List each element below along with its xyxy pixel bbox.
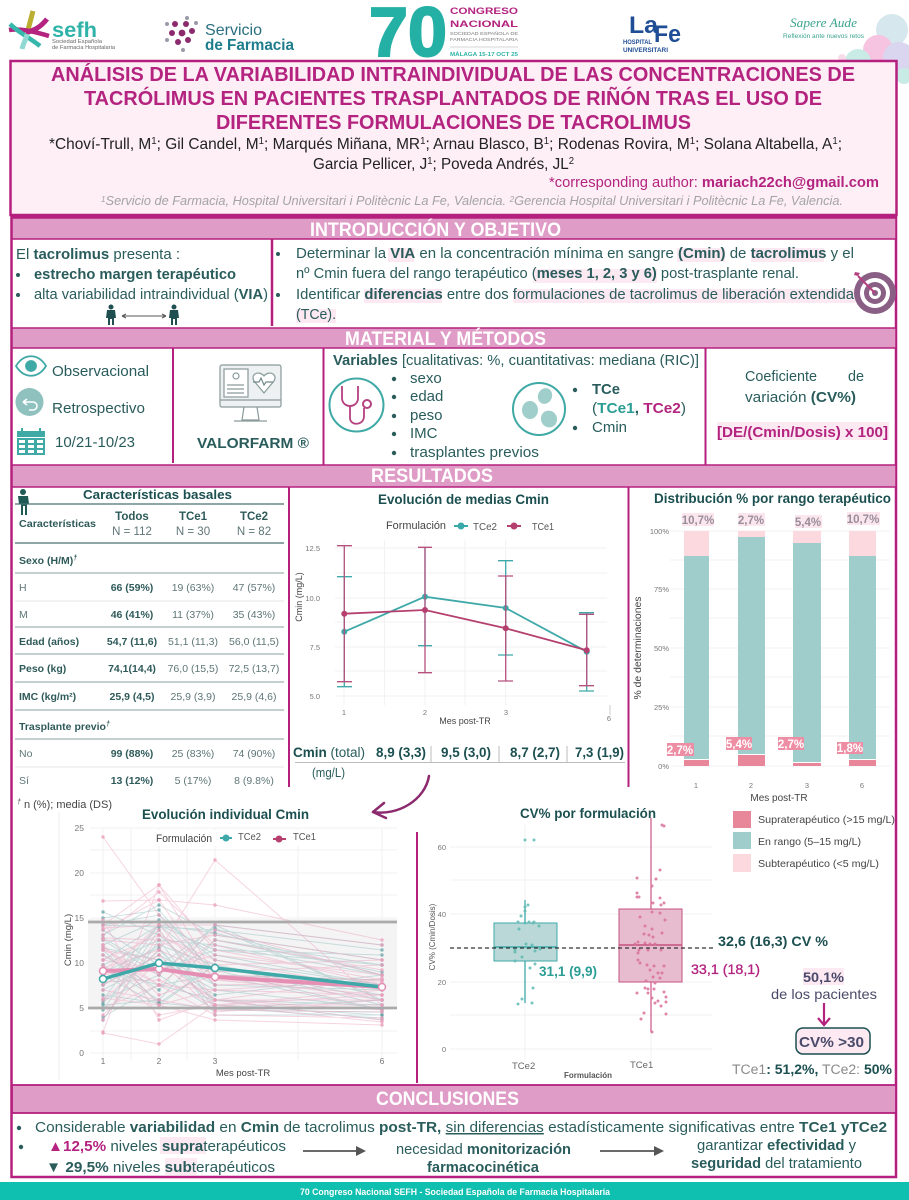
title: ANÁLISIS DE LA VARIABILIDAD INTRAINDIVIDUAL DE LAS CONCENTRACIONES DE xyxy=(51,63,855,86)
authors: 1 xyxy=(690,136,696,147)
spaghetti chart xyxy=(63,823,397,1079)
legend: Formulación xyxy=(386,520,446,532)
line chart: 10.0 xyxy=(305,594,320,603)
affiliations: Gerencia Hospital Universitari i Politècnic La Fe, Valencia. xyxy=(514,194,843,208)
spaghetti chart: 10 xyxy=(75,958,84,968)
logo: 70 congreso nacional: FARMACIA HOSPITALARIA xyxy=(450,37,518,42)
legend: TCe1 xyxy=(532,522,554,533)
reference line xyxy=(450,947,713,949)
table: header: Características xyxy=(19,518,96,530)
title: DIFERENTES FORMULACIONES DE TACROLIMUS xyxy=(216,112,691,134)
panel: diseño del estudio xyxy=(16,348,173,463)
table: header: N = 82 xyxy=(237,526,271,538)
title: TACRÓLIMUS EN PACIENTES TRASPLANTADOS DE RIÑÓN TRAS EL USO DE xyxy=(84,86,822,110)
mean lines xyxy=(100,960,386,990)
footer band: 70 Congreso Nacional SEFH - Sociedad Española de Farmacia Hospitalaria xyxy=(300,1187,611,1197)
heading: material y métodos xyxy=(12,328,896,350)
logo: sefh: Sociedad Española xyxy=(52,39,102,45)
authors: 1 xyxy=(259,136,264,147)
panel: coeficiente de variación: de xyxy=(848,368,864,385)
table footnote: † xyxy=(17,799,21,806)
table: cmin total: 7,3 (1,9) xyxy=(575,745,624,760)
text: niveles: ▲12,5% niveles supraterapéuticos xyxy=(48,1138,286,1155)
stacked bar chart: 0% xyxy=(658,762,669,771)
icon: target xyxy=(854,272,896,314)
text: niveles: ▼ 29,5% niveles subterapéuticos xyxy=(46,1159,275,1176)
corresponding author: *corresponding author: mariach22ch@gmail.com xyxy=(549,174,879,191)
text: objetivos: (TCe). xyxy=(296,306,336,323)
table: cmin total: (mg/L) xyxy=(312,765,345,780)
legend xyxy=(150,830,322,846)
table: rows: 74,1(14,4) xyxy=(108,663,156,675)
authors: ; Marqués Miñana, MR xyxy=(264,136,420,153)
individual lines: tce2 xyxy=(103,905,382,1020)
authors: ; Poveda Andrés, JL xyxy=(432,156,569,173)
heading: introducción y objetivo xyxy=(12,218,896,241)
list: variables xyxy=(392,370,539,461)
authors: Garcia Pellicer, J xyxy=(313,156,433,173)
legend: rango terapéutico: Subterapéutico (<5 mg/L) xyxy=(758,858,879,870)
main frame xyxy=(12,217,896,1177)
table: rows: IMC (kg/m²) xyxy=(19,691,76,703)
spaghetti chart: Cmin (mg/L) xyxy=(63,914,74,966)
table: rows: 56,0 (11,5) xyxy=(229,636,279,648)
table: rows: 13 (12%) xyxy=(111,775,153,787)
table: rows: 35 (43%) xyxy=(233,609,275,621)
line chart: 2 xyxy=(423,708,427,717)
spaghetti chart: Mes post-TR xyxy=(216,1068,270,1079)
panel: coeficiente de variación: Coeficiente xyxy=(745,368,817,385)
table: rows: Edad (años) xyxy=(19,636,79,648)
icon: person xyxy=(18,489,29,515)
series: tce2 xyxy=(337,548,594,691)
labels: supraterapéutico: 2,7% xyxy=(778,739,804,751)
table: header: N = 112 xyxy=(112,526,152,538)
logo: sapere aude: Sapere Aude xyxy=(790,15,857,30)
panel: diseño del estudio: Retrospectivo xyxy=(52,400,145,417)
line chart xyxy=(294,540,611,726)
line chart: 5.0 xyxy=(310,692,320,701)
panel: valorfarm xyxy=(197,348,324,466)
logo: 70 congreso nacional xyxy=(369,0,518,71)
stacked bar chart xyxy=(632,512,890,804)
table: rows: M xyxy=(19,609,28,621)
list: variables: sexo xyxy=(410,370,442,387)
table lines xyxy=(15,504,284,767)
panel: características basales xyxy=(15,487,289,811)
authors: 1 xyxy=(427,156,433,167)
heading: resultados: RESULTADOS xyxy=(371,466,493,487)
icon: calendar xyxy=(17,428,45,455)
boxplot chart: 0 xyxy=(442,1045,446,1054)
stacked bar chart: 50% xyxy=(654,644,669,653)
chart title: CV% por formulación xyxy=(520,806,656,821)
panel: valorfarm: VALORFARM ® xyxy=(197,435,309,452)
list: variables: IMC xyxy=(410,425,438,442)
panel: diseño del estudio: 10/21-10/23 xyxy=(55,434,135,451)
list: variables: edad xyxy=(410,388,443,405)
spaghetti chart: 15 xyxy=(75,913,84,923)
labels: subterapéutico: 5,4% xyxy=(795,517,821,529)
panel: evolución individual cmin xyxy=(59,807,397,1080)
heading: material y métodos: MATERIAL Y MÉTODOS xyxy=(345,328,546,350)
logo: 70 congreso nacional: NACIONAL xyxy=(450,19,518,30)
table: rows: Sexo (H/M) xyxy=(19,555,73,567)
footer band xyxy=(0,1182,909,1200)
icon: back arrow xyxy=(16,388,44,416)
table: rows: 25 (83%) xyxy=(172,748,214,760)
spaghetti chart: 6 xyxy=(380,1056,385,1066)
logo: 70 congreso nacional: CONGRESO xyxy=(450,6,518,17)
table: rows: 72,5 (13,7) xyxy=(229,663,279,675)
table: header: Todos xyxy=(115,511,149,523)
logo: 70 congreso nacional: SOCIEDAD ESPAÑOLA DE xyxy=(450,30,518,36)
icon: pills xyxy=(513,383,565,435)
logo: sefh: sefh xyxy=(52,19,97,42)
table: rows: 54,7 (11,6) xyxy=(107,636,157,648)
table: header: TCe1 xyxy=(179,511,208,523)
legend xyxy=(386,520,554,533)
line chart: 12.5 xyxy=(305,544,320,553)
logo: servicio de farmacia xyxy=(165,16,294,54)
logo: la fe: La xyxy=(629,12,659,39)
spaghetti chart: 1 xyxy=(101,1056,106,1066)
annotations: medians: 31,1 (9,9) xyxy=(539,964,597,979)
table: rows xyxy=(19,555,279,787)
list: variables: trasplantes previos xyxy=(410,444,539,461)
spaghetti chart: 5 xyxy=(79,1003,84,1013)
table: header: TCe2 xyxy=(240,511,268,523)
table: rows: Trasplante previo xyxy=(19,721,106,733)
text: efectividad y seguridad xyxy=(691,1137,862,1172)
stacked bar chart: % de determinaciones xyxy=(632,596,644,700)
stacked bar chart: 25% xyxy=(654,703,669,712)
authors: 1 xyxy=(420,136,426,147)
affiliations: 2 xyxy=(509,195,515,204)
labels: supraterapéutico: 1,8% xyxy=(837,743,863,755)
text: niveles xyxy=(19,1137,286,1176)
authors: *Choví-Trull, M xyxy=(49,136,155,153)
boxplot chart: Formulación xyxy=(564,1071,612,1080)
table: rows: 46 (41%) xyxy=(111,609,153,621)
list: variables: peso xyxy=(410,407,443,424)
panel: title xyxy=(10,61,896,215)
stacked bar chart: 6 xyxy=(860,781,864,790)
line chart: Cmin (mg/L) xyxy=(294,572,304,622)
stacked bar chart: 75% xyxy=(654,585,669,594)
legend: TCe2 xyxy=(238,832,261,843)
chart title: Evolución de medias Cmin xyxy=(378,492,549,507)
panel: coeficiente de variación: [DE/(Cmin/Dosis) x 100] xyxy=(717,424,888,441)
boxplot chart: 40 xyxy=(438,910,446,919)
annotations: medians: 33,1 (18,1) xyxy=(691,962,760,977)
logo: sapere aude: Reflexión ante nuevos retos xyxy=(783,33,865,40)
table: rows: 19 (63%) xyxy=(172,582,214,594)
text: porcentaje por formulación: TCe1: 51,2%, TCe2: 50% xyxy=(732,1062,892,1077)
text: objetivos: Determinar la VIA en la concentración mínima en sangre (Cmin) de tacrolimus y el xyxy=(296,245,854,262)
table: rows: No xyxy=(19,748,33,760)
spaghetti chart: 0 xyxy=(79,1048,84,1058)
logo: sefh: de Farmacia Hospitalaria xyxy=(52,45,115,51)
panel: diseño del estudio: Observacional xyxy=(52,363,149,380)
text: tacrolimus presenta: alta variabilidad intraindividual (VIA) xyxy=(34,286,268,303)
table: rows: H xyxy=(19,582,27,594)
table: rows: 25,9 (4,5) xyxy=(110,691,154,703)
logo: servicio de farmacia: de Farmacia xyxy=(205,37,294,54)
boxplot chart: TCe2 xyxy=(512,1061,535,1072)
authors: ; Rodenas Rovira, M xyxy=(549,136,690,153)
table: rows: 8 (9.8%) xyxy=(234,775,274,787)
table: rows: Sí xyxy=(19,775,29,787)
stacked bar chart: Mes post-TR xyxy=(750,793,808,804)
stacked bar chart: 2 xyxy=(749,781,753,790)
table: rows: 47 (57%) xyxy=(233,582,275,594)
panel: coeficiente de variación: variación (CV%) xyxy=(745,389,856,406)
table: rows: 74 (90%) xyxy=(233,748,275,760)
line chart: 6 xyxy=(607,714,611,723)
boxplot chart: 20 xyxy=(438,978,446,987)
affiliations: 1 xyxy=(101,195,106,204)
panel: objetivo xyxy=(276,245,896,323)
stacked bar chart: 3 xyxy=(805,781,809,790)
spaghetti chart: 3 xyxy=(213,1056,218,1066)
icon: stethoscope xyxy=(330,378,384,432)
annotations: medians: 32,6 (16,3) CV % xyxy=(718,934,828,949)
panel: evolución de medias cmin xyxy=(293,487,628,787)
panel: introducción xyxy=(16,239,272,326)
text: monitorización xyxy=(396,1141,571,1176)
table: rows: 76,0 (15,5) xyxy=(168,663,218,675)
text: objetivos: nº Cmin fuera del rango terapéutico (meses 1, 2, 3 y 6) post-trasplante renal. xyxy=(296,265,799,282)
boxplot chart: 60 xyxy=(438,843,446,852)
table: rows: † xyxy=(73,555,77,562)
panel: variables: Variables [cualitativas: %, cuantitativas: mediana (RIC)] xyxy=(333,352,699,369)
logo: sefh xyxy=(9,11,115,51)
legend: rango terapéutico: En rango (5–15 mg/L) xyxy=(758,836,861,848)
authors: 1 xyxy=(544,136,550,147)
logo: la fe: UNIVERSITARI xyxy=(623,47,668,54)
box: tce2 xyxy=(494,900,557,1003)
panel: variables xyxy=(330,348,706,466)
text: variabilidad: Considerable variabilidad en Cmin de tacrolimus post-TR, sin diferencias estadísticamente significativas entre TCe1 yTCe2 xyxy=(35,1119,887,1136)
labels: supraterapéutico xyxy=(667,737,863,757)
box: tce1 xyxy=(619,818,682,1032)
text: monitorización: necesidad monitorización xyxy=(396,1141,571,1158)
therapeutic limits xyxy=(88,922,397,1008)
text: tacrolimus presenta xyxy=(16,246,268,303)
text: efectividad y seguridad: garantizar efectividad y xyxy=(697,1137,856,1154)
annotations: medians xyxy=(539,934,828,979)
stacked bar chart: 100% xyxy=(650,527,669,536)
panel: conclusiones xyxy=(17,1119,887,1176)
panel: distribución por rango terapéutico xyxy=(632,491,891,804)
table: rows: 25,9 (3,9) xyxy=(171,691,215,703)
panel: coeficiente de variación xyxy=(717,368,889,441)
points: tce1 xyxy=(635,825,666,1032)
table: rows: † xyxy=(106,721,110,728)
boxplot chart: CV% (Cmin/Dosis) xyxy=(428,903,437,970)
table: rows: 99 (88%) xyxy=(111,748,153,760)
icon: two people with arrow xyxy=(106,304,179,325)
table: rows: 66 (59%) xyxy=(111,582,153,594)
heading: introducción y objetivo: INTRODUCCIÓN Y OBJETIVO xyxy=(310,219,561,241)
spaghetti chart: 25 xyxy=(75,823,84,833)
table title: Características basales xyxy=(83,488,232,502)
table: cmin total: 9,5 (3,0) xyxy=(441,745,491,760)
chart title: Distribución % por rango terapéutico xyxy=(654,491,891,506)
callout: 50,1 % pacientes: 50,1% xyxy=(803,969,845,985)
table: rows: 51,1 (11,3) xyxy=(168,636,218,648)
text: objetivos xyxy=(276,245,855,323)
labels: supraterapéutico: 2,7% xyxy=(667,745,693,757)
chart title: Evolución individual Cmin xyxy=(142,807,309,822)
labels: subterapéutico xyxy=(682,512,880,529)
logo: servicio de farmacia: Servicio xyxy=(205,22,262,39)
arrow: down xyxy=(818,1003,830,1025)
callout: 50,1 % pacientes: de los pacientes xyxy=(771,986,877,1002)
icon: monitor xyxy=(220,365,281,421)
text: monitorización: farmacocinética xyxy=(427,1159,540,1176)
legend: TCe2 xyxy=(473,522,497,533)
authors: ; xyxy=(838,136,842,153)
boxplot chart: TCe1 xyxy=(630,1060,653,1071)
list: tce: Cmin xyxy=(592,419,627,436)
boxplot chart xyxy=(428,818,713,1080)
labels: subterapéutico: 10,7% xyxy=(682,515,714,527)
logo: sapere aude xyxy=(783,14,909,84)
arrow: curved from means to individual xyxy=(373,776,429,818)
labels: subterapéutico: 10,7% xyxy=(847,514,879,526)
heading: conclusiones xyxy=(12,1085,896,1113)
table: cmin total xyxy=(293,745,625,780)
legend: rango terapéutico xyxy=(733,811,895,872)
individual lines: tce1 xyxy=(103,837,382,1044)
logo: la fe xyxy=(623,12,681,54)
authors: 1 xyxy=(832,136,838,147)
text: objetivos: Identificar diferencias entre dos formulaciones de tacrolimus de liberación extendida xyxy=(296,286,855,303)
authors: ; Solana Altabella, A xyxy=(695,136,833,153)
labels: supraterapéutico: 5,4% xyxy=(726,739,752,751)
spaghetti chart: 2 xyxy=(157,1056,162,1066)
callout: 50,1 % pacientes xyxy=(771,968,877,1054)
points: tce2 xyxy=(515,840,540,1004)
stacked bar chart: 1 xyxy=(694,781,698,790)
table: cmin total: 8,9 (3,3) xyxy=(376,745,426,760)
authors xyxy=(49,136,842,173)
list: tce: (TCe1, TCe2) xyxy=(592,400,686,417)
line chart: 3 xyxy=(504,708,508,717)
authors: ; Gil Candel, M xyxy=(157,136,259,153)
table: header: N = 30 xyxy=(176,526,210,538)
table: header xyxy=(19,511,271,538)
legend: TCe1 xyxy=(293,832,316,843)
text: efectividad y seguridad: seguridad del tratamiento xyxy=(691,1155,862,1172)
list: tce: TCe xyxy=(592,381,620,398)
table: cmin total: 8,7 (2,7) xyxy=(510,745,560,760)
heading: resultados xyxy=(12,465,896,487)
spaghetti chart: 20 xyxy=(75,868,84,878)
table: rows: 25,9 (4,6) xyxy=(232,691,276,703)
authors: 2 xyxy=(569,156,574,167)
authors: 1 xyxy=(151,136,157,147)
arrow xyxy=(303,1146,366,1156)
icon: eye xyxy=(16,356,46,376)
table: rows: 5 (17%) xyxy=(175,775,211,787)
title xyxy=(51,63,855,134)
series: tce1 xyxy=(337,546,594,686)
logo: la fe: HOSPITAL xyxy=(623,39,652,46)
table: cmin total: Cmin (total) xyxy=(293,745,365,760)
logo: 70 congreso nacional: MÁLAGA 15-17 OCT 25 xyxy=(450,51,518,58)
table: rows: 11 (37%) xyxy=(172,609,214,621)
text: tacrolimus presenta: estrecho margen terapéutico xyxy=(34,266,236,283)
legend: rango terapéutico: Supraterapéutico (>15 mg/L) xyxy=(758,814,895,826)
text: tacrolimus presenta: El tacrolimus presenta : xyxy=(16,246,180,263)
panel: cv por formulación xyxy=(428,806,895,1080)
arrow xyxy=(600,1146,664,1156)
line chart: Mes post-TR xyxy=(439,716,491,726)
heading: conclusiones: CONCLUSIONES xyxy=(376,1089,519,1110)
table footnote: n (%); media (DS) xyxy=(21,799,112,811)
affiliations: Servicio de Farmacia, Hospital Universitari i Politècnic La Fe, Valencia. xyxy=(106,194,510,208)
list: tce xyxy=(573,381,686,436)
legend: Formulación xyxy=(156,833,212,845)
logo: la fe: Fe xyxy=(654,21,681,48)
table: rows: Peso (kg) xyxy=(19,663,66,675)
line chart: 1 xyxy=(342,708,346,717)
callout: 50,1 % pacientes: CV% >30 xyxy=(799,1034,864,1051)
line chart: 7.5 xyxy=(310,643,320,652)
authors: ; Arnau Blasco, B xyxy=(425,136,544,153)
labels: subterapéutico: 2,7% xyxy=(738,515,764,527)
